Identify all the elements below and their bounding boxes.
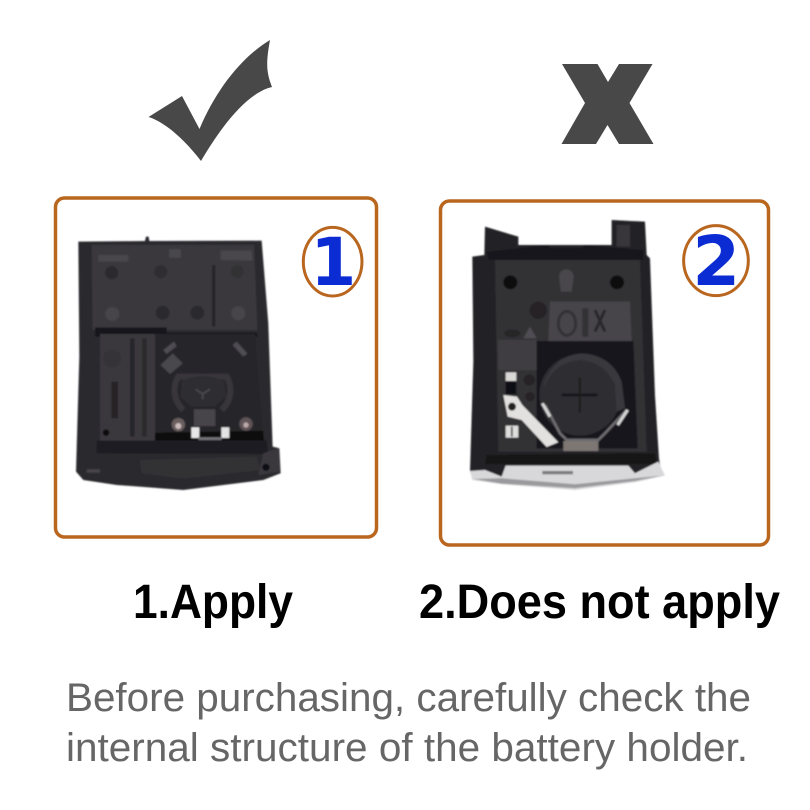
- label: apply: 1.Apply: [133, 576, 293, 629]
- icon: check mark: [148, 40, 272, 161]
- badge: number 2: 2: [692, 222, 740, 302]
- badge: number 1: 1: [310, 224, 356, 301]
- label: does not apply: 2.Does not apply: [419, 576, 780, 629]
- note: purchase advice: internal structure of the battery holder.: [66, 726, 748, 770]
- note: purchase advice: Before purchasing, carefully check the: [66, 676, 751, 720]
- image: key fob holder type 1: [76, 237, 281, 490]
- panel: non-applicable battery holder: [440, 201, 768, 545]
- icon: cross mark: [562, 64, 654, 144]
- image: key fob holder type 2: [470, 220, 665, 490]
- panel: applicable battery holder: [56, 198, 376, 537]
- note: purchase advice: [66, 676, 751, 770]
